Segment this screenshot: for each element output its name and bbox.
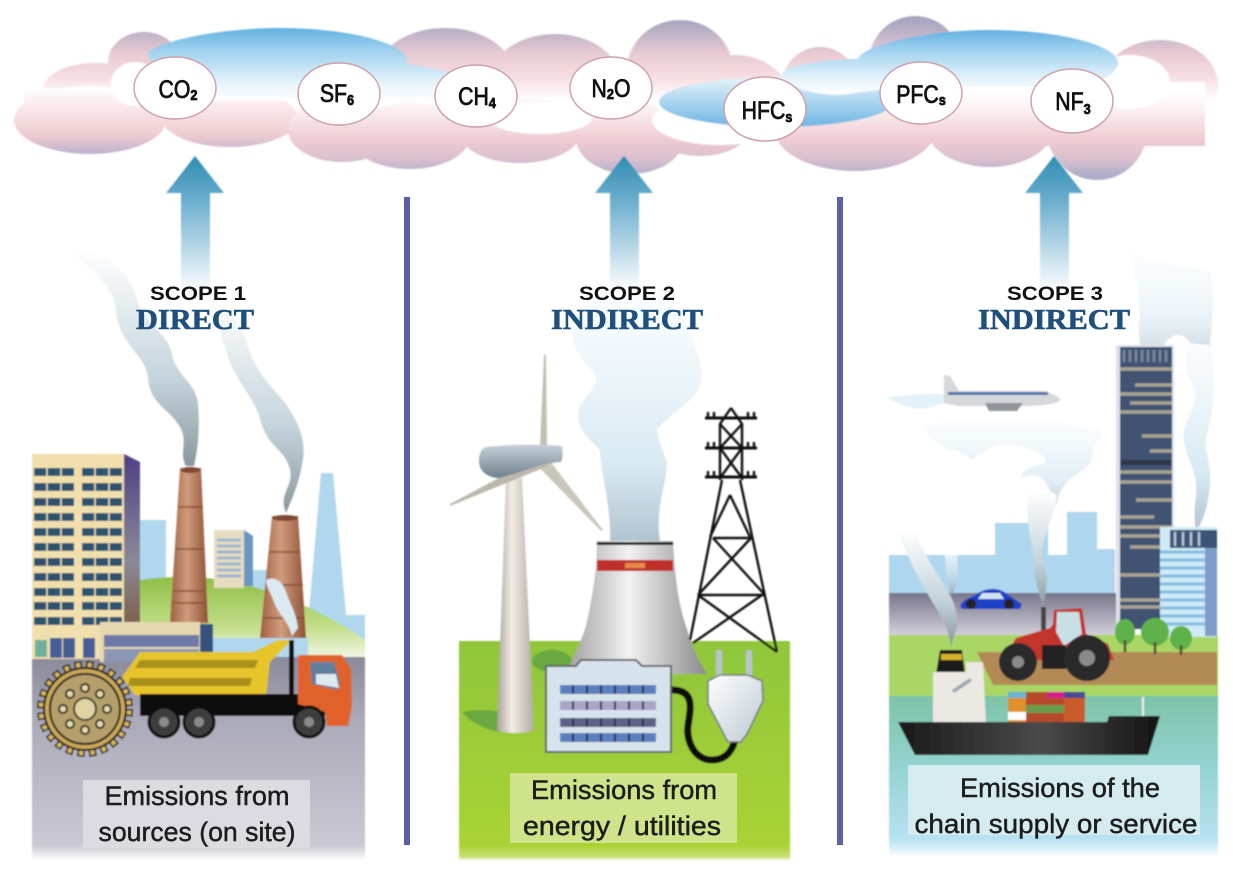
caption box: scope 2: energy / utilities [523,811,721,841]
PFCs bubble: s [939,91,946,108]
power pylon [690,408,777,652]
N2O bubble: O [614,74,630,102]
divider left [404,197,410,845]
plug [708,650,763,742]
caption box: scope 1 [83,780,310,848]
caption box: scope 3: chain supply or service [914,809,1198,839]
mid and right cloud lobes [288,80,1205,180]
grass [889,635,1218,697]
brown field [977,652,1217,685]
caption box: scope 2: Emissions from [531,775,717,805]
road [889,593,1119,638]
NF3 bubble [1031,69,1113,133]
smoke plumes [66,249,304,513]
caption box: scope 1: Emissions from [104,781,290,811]
caption box: scope 3: Emissions of the [960,773,1160,803]
power cord [672,690,736,760]
NF3 bubble: NF [1055,87,1084,115]
ground [32,657,365,860]
CH4 bubble: CH [458,82,489,110]
green hill [140,577,365,660]
arrow: scope 3 [1025,156,1083,293]
tractor [999,607,1114,681]
scope 1 heading: SCOPE 1 [150,284,246,305]
illustration: scope 2 [450,290,790,861]
small distant building [214,530,253,588]
scope 3 heading: SCOPE 3 [1007,284,1103,305]
control panel [546,660,671,752]
illustration: scope 1 [32,249,365,860]
CH4 bubble [435,65,517,127]
lower cloud lobes [14,86,298,154]
PFCs bubble: PFC [896,80,939,108]
dump truck [122,640,352,737]
chimney 1 [170,467,208,623]
wind turbine [450,355,603,733]
illustration: scope 3 [888,250,1218,855]
apartment block [32,454,140,659]
SF6 bubble [298,63,380,125]
arrow: scope 1 [166,156,224,293]
scope 1 heading [136,284,254,336]
panel: scope 3 indirect [888,250,1218,855]
arrow: scope 2 [595,156,653,293]
distant skyline [889,512,1115,600]
caption box: scope 3 [908,765,1200,839]
CO2 bubble: CO [159,75,190,103]
NF3 bubble: 3 [1084,100,1091,117]
shadows [462,650,572,732]
CO2 bubble: 2 [190,86,198,103]
low office block [100,622,213,662]
HFCs bubble [724,77,806,141]
steam plume [572,290,702,541]
glass office tower [1160,527,1217,637]
SF6 bubble: 6 [347,91,354,108]
CO2 bubble [134,57,216,119]
scope 2 heading [551,284,703,336]
panel: scope 2 indirect [450,284,790,861]
trees [1115,618,1192,655]
N2O bubble: N [592,74,607,102]
caption box: scope 1: sources (on site) [98,817,296,847]
chimney 2 [260,515,306,638]
SF6 bubble: SF [320,79,347,107]
panel: scope 1 direct [32,249,365,860]
divider right [837,197,843,845]
car [960,589,1022,609]
cooling tower [565,541,707,674]
scope 3 heading: INDIRECT [978,305,1130,336]
HFCs bubble: s [785,108,793,125]
N2O bubble: 2 [607,85,614,102]
tractor exhaust and ship smoke [897,491,1057,646]
gear icon [42,666,128,752]
N2O bubble [570,57,652,119]
scope 1 heading: DIRECT [136,305,254,336]
scope 2 heading: INDIRECT [551,305,703,336]
upper cloud lobes [43,16,1218,145]
PFCs bubble [880,62,962,124]
cloud band [14,16,1218,180]
container ship [898,650,1160,755]
water [889,696,1218,855]
white cloud gaps [111,55,1170,145]
gas labels [134,57,1113,141]
caption box: scope 2 [510,773,737,843]
blue cloud overlays [147,28,1118,127]
HFCs bubble: HFC [742,96,785,124]
scope 3 heading [978,284,1130,336]
green ground [459,641,790,861]
CH4 bubble: 4 [489,94,496,111]
airplane [888,375,1061,411]
blue strip behind truck [213,638,308,663]
upper smoke [920,250,1214,530]
scope 2 heading: SCOPE 2 [579,284,675,305]
distant skyline [140,473,365,660]
skyscraper [1116,345,1174,630]
